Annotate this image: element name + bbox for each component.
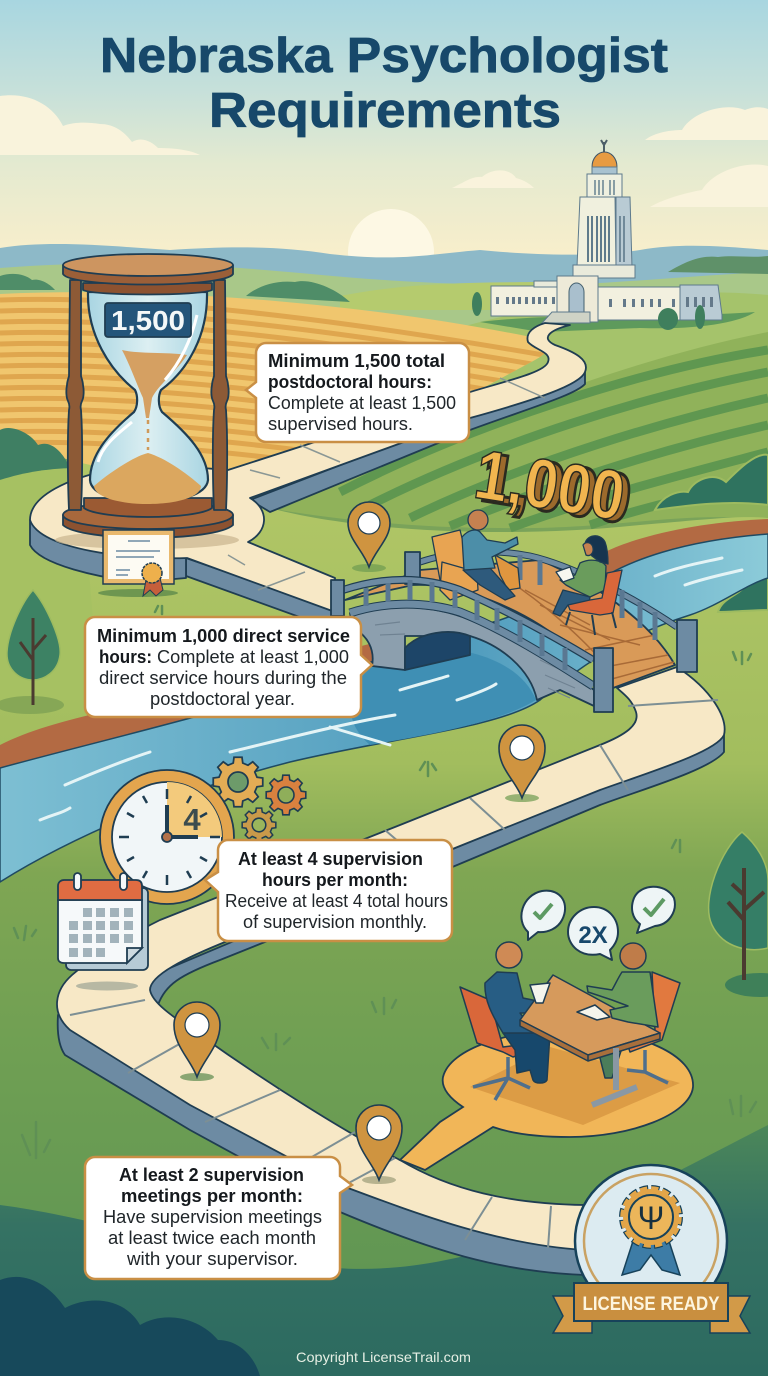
torso bbox=[560, 560, 606, 597]
hourglass: 1,500 bbox=[111, 305, 185, 336]
person in armchair on bridge bbox=[432, 510, 520, 600]
left chair bbox=[460, 987, 533, 1057]
callout: 1,500 total hours: supervised hours. bbox=[268, 414, 413, 434]
callout: 4 supervision hours: hours per month: bbox=[262, 870, 408, 890]
right wing bbox=[598, 287, 684, 320]
distant hills bbox=[0, 244, 768, 340]
callout: 1,500 total hours: Minimum 1,500 total bbox=[268, 351, 445, 371]
upper tower bbox=[587, 174, 622, 198]
calendar bbox=[58, 873, 148, 990]
falling sand bbox=[147, 420, 149, 450]
callout: 2 supervision meetings: with your supervisor. bbox=[126, 1249, 298, 1269]
title bbox=[100, 29, 668, 138]
right chair bbox=[628, 972, 680, 1052]
navy person bbox=[503, 1033, 550, 1083]
title: Nebraska Psychologist bbox=[100, 29, 668, 83]
number plate bbox=[105, 303, 191, 337]
chair bbox=[568, 570, 622, 615]
dome bbox=[592, 152, 617, 167]
front bridge rail bbox=[331, 580, 613, 712]
torso and arm bbox=[462, 530, 518, 570]
rosette bbox=[623, 1189, 679, 1245]
callout: 2 supervision meetings: meetings per month: bbox=[121, 1186, 303, 1206]
person reading on red chair bbox=[553, 536, 622, 635]
central pavilion bbox=[557, 276, 598, 322]
left wing bbox=[491, 286, 557, 316]
clock with gears bbox=[100, 757, 306, 904]
callout: 4 supervision hours: At least 4 supervision bbox=[238, 849, 423, 869]
medallion bbox=[575, 1165, 727, 1317]
location pins bbox=[174, 502, 545, 1184]
orange gear bbox=[266, 775, 306, 815]
sand upper bbox=[122, 350, 187, 418]
callout: 2 supervision meetings: Have supervision meetings bbox=[103, 1207, 322, 1227]
small gear bbox=[242, 808, 276, 842]
speech bubbles bbox=[521, 887, 675, 960]
wooden deck bbox=[345, 560, 675, 688]
callout: 2 supervision meetings: At least 2 supervision bbox=[119, 1165, 304, 1185]
tree left bbox=[0, 590, 64, 714]
mid ground bbox=[0, 462, 768, 1376]
legs bbox=[463, 568, 515, 600]
callout: 1,500 total hours bbox=[246, 343, 469, 442]
sun bbox=[348, 209, 434, 295]
hourglass bbox=[55, 254, 239, 549]
tower shaft bbox=[577, 197, 616, 267]
callout: 1,000 direct service hours: direct service hours during the bbox=[99, 668, 347, 688]
state capitol building bbox=[472, 140, 755, 332]
trees bbox=[472, 292, 705, 330]
table bbox=[520, 975, 660, 1055]
callout: 2 supervision meetings: at least twice each month bbox=[108, 1228, 316, 1248]
callout: 1,000 direct service hours bbox=[85, 617, 372, 717]
wheat field bbox=[0, 292, 544, 469]
banner bbox=[574, 1283, 728, 1321]
meeting table and people bbox=[460, 942, 680, 1105]
left post bbox=[66, 280, 84, 510]
top disk bbox=[63, 265, 233, 284]
sand lower bbox=[94, 453, 201, 504]
callout: 1,000 direct service hours: Minimum 1,000 direct service bbox=[97, 626, 350, 646]
clock with gears: 4 bbox=[183, 802, 201, 837]
title: Requirements bbox=[209, 84, 561, 138]
top neck bbox=[83, 283, 212, 294]
right fields bbox=[280, 292, 768, 528]
dark foreground bushes bbox=[0, 1277, 260, 1376]
sky bbox=[0, 0, 768, 300]
glass bulb bbox=[88, 292, 208, 502]
callout: 4 supervision hours: Receive at least 4 total hours bbox=[225, 891, 448, 911]
callout: 2 supervision meetings bbox=[85, 1157, 352, 1279]
four hour wedge bbox=[167, 782, 222, 837]
certificate bbox=[98, 530, 178, 597]
license ready badge: Ψ bbox=[638, 1200, 664, 1236]
clock ring bbox=[100, 770, 234, 904]
clock face bbox=[112, 782, 222, 892]
glass highlight bbox=[98, 315, 197, 462]
winding path upper section bbox=[30, 323, 586, 628]
speech bubbles: 2X bbox=[578, 922, 608, 949]
drum bbox=[592, 167, 617, 174]
callout: 4 supervision hours: of supervision monthly. bbox=[243, 912, 427, 932]
legs bbox=[553, 590, 590, 616]
meeting platform bbox=[400, 1030, 693, 1170]
winding path middle and lower section bbox=[57, 667, 725, 1275]
callout: 1,500 total hours: Complete at least 1,500 bbox=[268, 393, 456, 413]
book bbox=[556, 567, 574, 582]
bridge bbox=[345, 552, 697, 706]
large gear bbox=[213, 757, 263, 807]
callout: 1,000 direct service hours: Complete at least 1,000 bbox=[157, 647, 349, 667]
license ready badge bbox=[553, 1165, 750, 1333]
armchair bbox=[432, 530, 470, 580]
steps bbox=[542, 312, 590, 323]
left hill with bushes bbox=[0, 428, 100, 700]
grass tufts bbox=[14, 606, 756, 1158]
stone arch bbox=[350, 607, 594, 706]
upper path seams bbox=[228, 378, 545, 590]
callout: 1,000 direct service hours: postdoctoral year. bbox=[150, 689, 295, 709]
3D 1,000 numeral: 1,000 bbox=[476, 438, 637, 538]
head bbox=[468, 510, 488, 530]
tree right bbox=[709, 832, 768, 997]
3D 1,000 numeral: 1,000 bbox=[470, 435, 630, 535]
banner tails bbox=[553, 1296, 592, 1333]
bottom base bbox=[63, 515, 233, 538]
license ready badge: LICENSE READY bbox=[582, 1294, 720, 1315]
ribbon tails bbox=[622, 1238, 680, 1275]
lower ground bbox=[0, 1125, 768, 1376]
green person bbox=[587, 972, 658, 1027]
callout: 1,000 direct service hours: hours: bbox=[99, 647, 152, 667]
right bushes bbox=[655, 455, 768, 612]
back rail bbox=[420, 552, 677, 627]
ground shadow bbox=[480, 312, 755, 332]
river bbox=[0, 519, 768, 882]
right post bbox=[211, 280, 229, 510]
tower base bbox=[573, 265, 635, 278]
callout: 1,500 total hours: postdoctoral hours: bbox=[268, 372, 432, 392]
copyright: Copyright LicenseTrail.com bbox=[296, 1349, 471, 1365]
green person legs bbox=[598, 1048, 622, 1078]
papers bbox=[577, 1005, 610, 1020]
head and hair bbox=[585, 536, 608, 564]
clouds bbox=[0, 95, 768, 207]
callout: 4 supervision hours bbox=[205, 840, 452, 941]
statue bbox=[601, 140, 607, 152]
